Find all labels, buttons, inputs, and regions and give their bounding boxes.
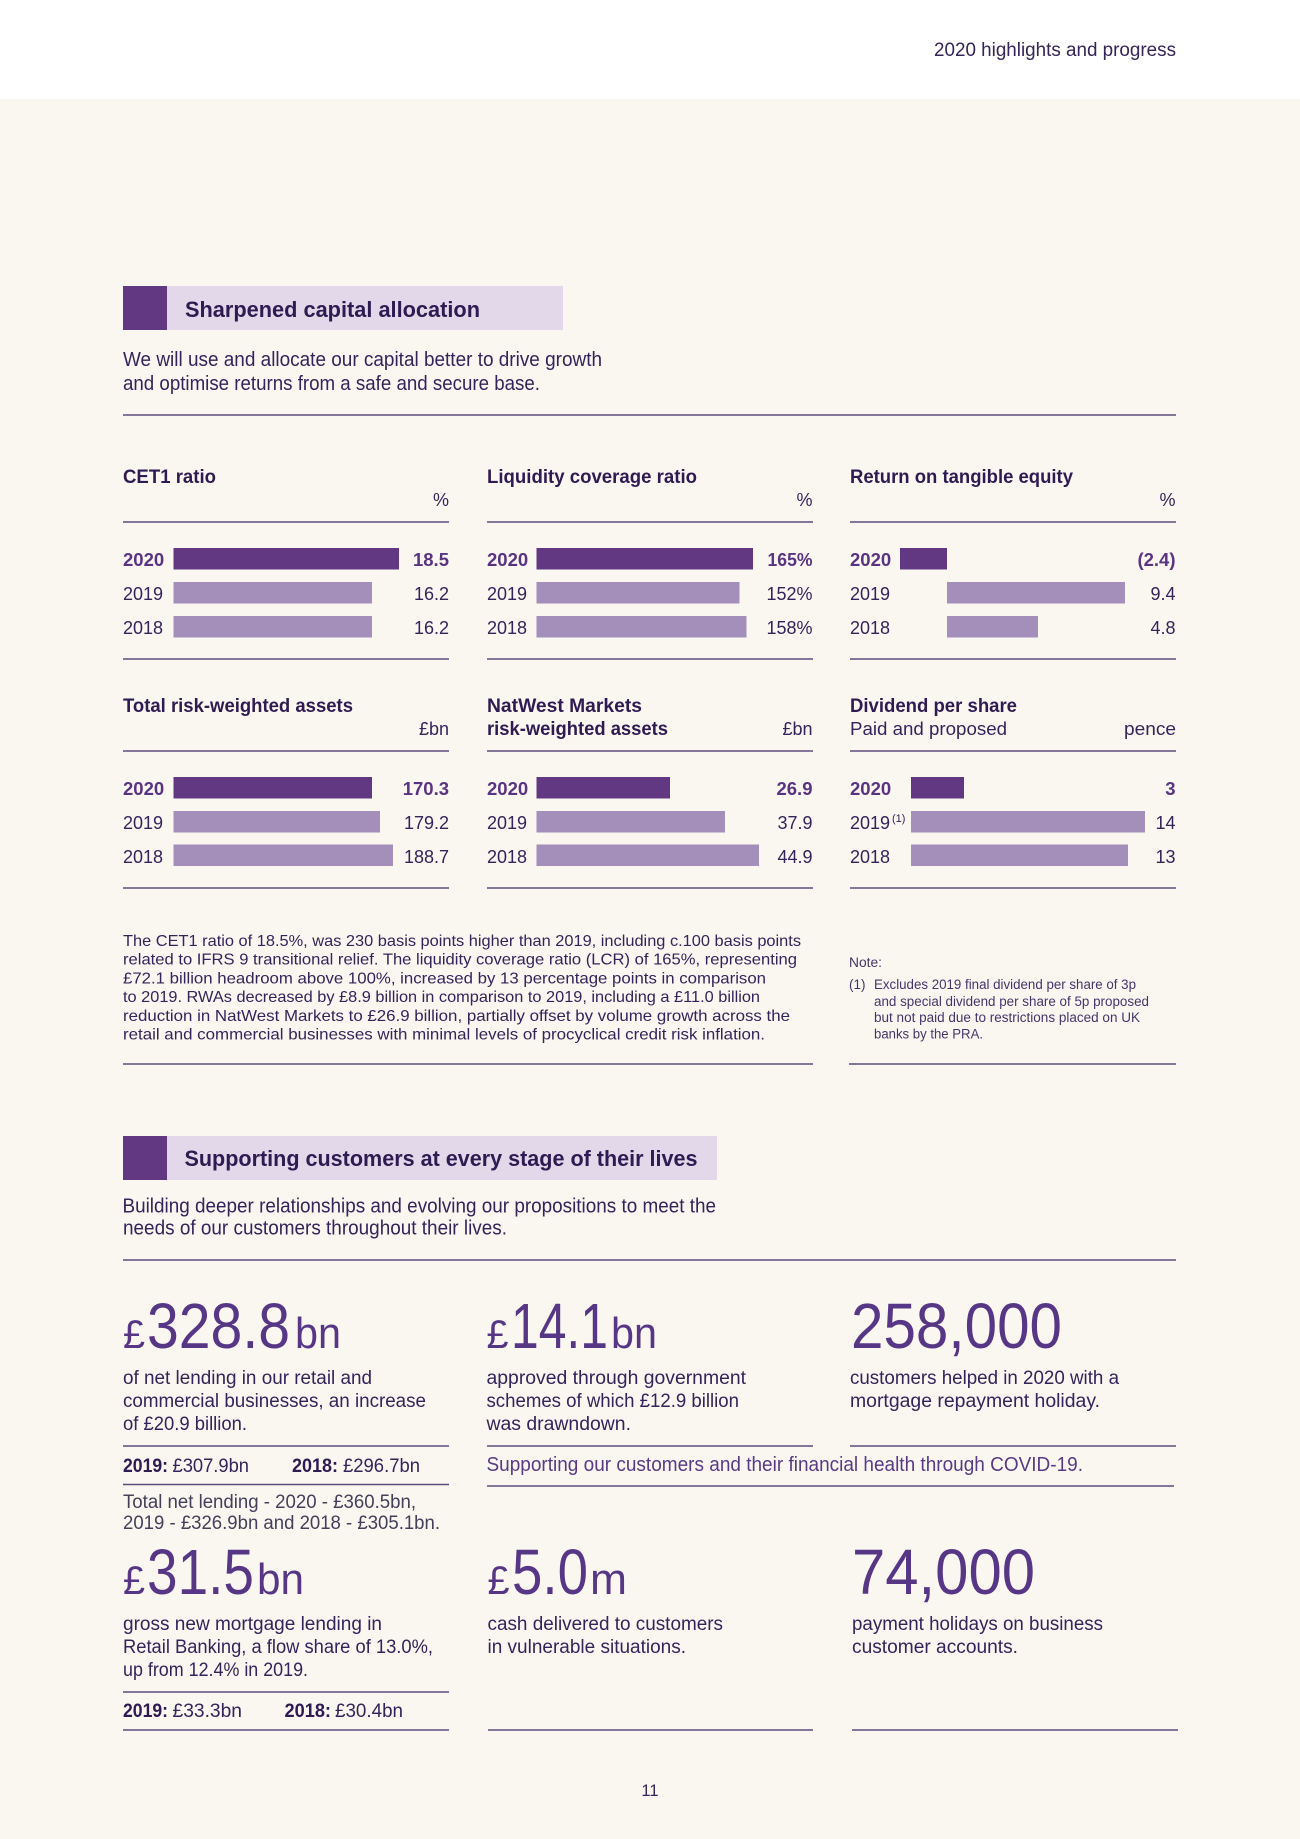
- section intro: capital allocation: [123, 349, 602, 395]
- panel: Total risk-weighted assets chart: Total risk-weighted assets: [123, 696, 353, 717]
- panel: Dividend per share chart: Paid and proposed: [850, 719, 1007, 739]
- panel: Total risk-weighted assets chart: [123, 696, 449, 888]
- panel: Dividend per share chart: 2020: [850, 778, 891, 799]
- section intro: capital allocation: We will use and allocate our capital better to drive growth: [123, 349, 602, 371]
- page number: 11: [641, 1782, 659, 1800]
- panel: NatWest Markets risk-weighted assets chart: 37.9: [777, 813, 812, 833]
- stat: government schemes: 14.1: [511, 1290, 608, 1362]
- panel: Dividend per share chart: Dividend per share: [850, 696, 1017, 717]
- panel: Return on tangible equity chart: Return on tangible equity: [850, 467, 1073, 488]
- note: total net lending: Total net lending - 2020 - £360.5bn,: [123, 1492, 416, 1513]
- panel: NatWest Markets risk-weighted assets chart: 2020: [487, 778, 528, 799]
- panel: Liquidity coverage ratio chart: 2020: [487, 549, 528, 570]
- panel: Return on tangible equity chart: 2020: [850, 549, 891, 570]
- panel: Total risk-weighted assets chart: 188.7: [404, 847, 449, 867]
- panel: CET1 ratio chart: 2018: [123, 618, 163, 638]
- panel: Dividend per share chart: 2018: [850, 847, 890, 867]
- stat: cash delivered: cash delivered to customers: [488, 1614, 723, 1635]
- stat: net lending: commercial businesses, an increase: [123, 1391, 426, 1412]
- stat: net lending: 2019:: [123, 1456, 168, 1477]
- stat: net lending: £296.7bn: [343, 1456, 420, 1477]
- stat: mortgage lending: gross new mortgage lending in: [123, 1614, 382, 1635]
- section intro: supporting customers: [122, 1196, 716, 1240]
- stat: government schemes: approved through government: [486, 1368, 747, 1389]
- stat: payment holidays: payment holidays on business: [852, 1614, 1103, 1635]
- panel: NatWest Markets risk-weighted assets chart: 44.9: [777, 847, 812, 867]
- stat: government schemes: £: [486, 1313, 508, 1357]
- panel: Dividend per share chart: 13: [1155, 847, 1176, 867]
- stat: mortgage lending: Retail Banking, a flow share of 13.0%,: [123, 1637, 433, 1658]
- panel: NatWest Markets risk-weighted assets chart: risk-weighted assets: [487, 719, 668, 740]
- stat: cash delivered: [488, 1536, 813, 1730]
- panel: Dividend per share chart: [850, 696, 1176, 888]
- panel: Return on tangible equity chart: 9.4: [1150, 584, 1176, 604]
- stat: payment holidays: customer accounts.: [852, 1637, 1018, 1658]
- panel: Return on tangible equity chart: 4.8: [1150, 618, 1176, 638]
- panel: CET1 ratio chart: 2020: [123, 549, 164, 570]
- note: total net lending: 2019 - £326.9bn and 2018 - £305.1bn.: [123, 1513, 440, 1534]
- commentary text block: reduction in NatWest Markets to £26.9 billion, partially offset by volume growth across the: [123, 1008, 790, 1025]
- panel: Return on tangible equity chart: 2018: [850, 618, 890, 638]
- panel: Liquidity coverage ratio chart: 152%: [766, 584, 812, 604]
- panel: Return on tangible equity chart: %: [1159, 490, 1176, 510]
- panel: Total risk-weighted assets chart: 2020: [123, 778, 164, 799]
- panel: CET1 ratio chart: %: [433, 490, 449, 510]
- panel: Liquidity coverage ratio chart: 165%: [768, 549, 812, 570]
- section heading: Sharpened capital allocation: [123, 286, 563, 330]
- commentary text block: The CET1 ratio of 18.5%, was 230 basis points higher than 2019, including c.100 basis points: [123, 933, 801, 950]
- panel: Liquidity coverage ratio chart: %: [796, 490, 812, 510]
- footnote: (1): [849, 977, 866, 992]
- commentary text block: retail and commercial businesses with minimal levels of procyclical credit risk inflation.: [123, 1026, 765, 1044]
- footnote: Note:: [849, 955, 882, 970]
- stat: mortgage repayment holiday: 258,000: [851, 1290, 1062, 1362]
- section intro: supporting customers: Building deeper relationships and evolving our propositions to meet the: [122, 1196, 716, 1218]
- panel: Liquidity coverage ratio chart: [487, 467, 813, 659]
- panel: Liquidity coverage ratio chart: 2019: [487, 584, 527, 604]
- stat: government schemes: schemes of which £12.9 billion: [486, 1391, 739, 1412]
- footnote: Excludes 2019 final dividend per share of 3p: [874, 977, 1136, 992]
- stat: net lending: [123, 1290, 449, 1484]
- stat: mortgage lending: 31.5: [147, 1536, 254, 1608]
- stat: cash delivered: m: [590, 1555, 627, 1604]
- stat: mortgage lending: [123, 1536, 449, 1730]
- stat: net lending: 2018:: [292, 1456, 338, 1477]
- panel: NatWest Markets risk-weighted assets chart: [487, 696, 813, 888]
- panel: Liquidity coverage ratio chart: 2018: [487, 618, 527, 638]
- panel: NatWest Markets risk-weighted assets chart: £bn: [782, 719, 812, 739]
- note: total net lending: [123, 1492, 440, 1534]
- stat: mortgage repayment holiday: [850, 1290, 1176, 1446]
- commentary text block: £72.1 billion headroom above 100%, increased by 13 percentage points in comparison: [123, 970, 766, 987]
- commentary text block: [123, 933, 801, 1044]
- footnote: banks by the PRA.: [874, 1026, 983, 1042]
- stat: cash delivered: 5.0: [512, 1536, 588, 1608]
- stat: government schemes: bn: [611, 1309, 657, 1358]
- panel: Return on tangible equity chart: (2.4): [1137, 549, 1176, 570]
- section heading: Supporting customers: [123, 1136, 717, 1180]
- panel: Liquidity coverage ratio chart: 158%: [766, 618, 812, 638]
- commentary text block: to 2019. RWAs decreased by £8.9 billion in comparison to 2019, including a £11.0 billion: [123, 989, 760, 1006]
- stat: net lending: £307.9bn: [172, 1456, 249, 1477]
- panel: Dividend per share chart: 2019: [850, 813, 890, 833]
- section heading: Supporting customers: Supporting customers at every stage of their lives: [184, 1146, 698, 1171]
- panel: Return on tangible equity chart: [850, 467, 1176, 659]
- stat: mortgage lending: bn: [257, 1555, 304, 1604]
- stat: net lending: of £20.9 billion.: [123, 1414, 247, 1435]
- footnote: but not paid due to restrictions placed on UK: [874, 1010, 1140, 1025]
- panel: Total risk-weighted assets chart: 170.3: [403, 778, 449, 799]
- panel: NatWest Markets risk-weighted assets chart: 2019: [487, 813, 527, 833]
- panel: NatWest Markets risk-weighted assets chart: 2018: [487, 847, 527, 867]
- stat: mortgage repayment holiday: mortgage repayment holiday.: [850, 1391, 1100, 1412]
- stat: mortgage lending: up from 12.4% in 2019.: [123, 1660, 308, 1681]
- panel: CET1 ratio chart: 2019: [123, 584, 163, 604]
- section intro: capital allocation: and optimise returns from a safe and secure base.: [123, 373, 540, 395]
- stat: net lending: 328.8: [147, 1290, 290, 1362]
- stat: mortgage lending: 2018:: [284, 1701, 331, 1722]
- panel: NatWest Markets risk-weighted assets chart: 26.9: [776, 778, 812, 799]
- panel: CET1 ratio chart: 16.2: [414, 584, 449, 604]
- footnote: [849, 955, 1149, 1042]
- stat: payment holidays: [852, 1536, 1178, 1730]
- stat: cash delivered: in vulnerable situations.: [488, 1637, 686, 1658]
- panel: Return on tangible equity chart: 2019: [850, 584, 890, 604]
- stat: cash delivered: £: [488, 1559, 510, 1603]
- panel: Liquidity coverage ratio chart: Liquidity coverage ratio: [487, 467, 697, 488]
- panel: Dividend per share chart: 14: [1155, 813, 1176, 833]
- commentary text block: related to IFRS 9 transitional relief. The liquidity coverage ratio (LCR) of 165%, representing: [123, 952, 797, 969]
- panel: CET1 ratio chart: [123, 467, 449, 659]
- page header title: 2020 highlights and progress: [934, 40, 1176, 61]
- panel: CET1 ratio chart: CET1 ratio: [123, 467, 216, 488]
- stat: mortgage lending: £33.3bn: [172, 1701, 242, 1722]
- panel: CET1 ratio chart: 18.5: [413, 549, 449, 570]
- stat: net lending: £: [123, 1313, 145, 1357]
- panel: Dividend per share chart: (1): [892, 813, 905, 825]
- stat: payment holidays: 74,000: [852, 1536, 1035, 1608]
- panel: Total risk-weighted assets chart: £bn: [419, 719, 449, 739]
- panel: Dividend per share chart: pence: [1124, 719, 1176, 739]
- panel: Total risk-weighted assets chart: 2019: [123, 813, 163, 833]
- panel: CET1 ratio chart: 16.2: [414, 618, 449, 638]
- stat: government schemes: was drawndown.: [485, 1414, 631, 1435]
- panel: Dividend per share chart: 3: [1165, 778, 1176, 799]
- panel: Total risk-weighted assets chart: 179.2: [404, 813, 449, 833]
- stat: mortgage repayment holiday: customers helped in 2020 with a: [850, 1368, 1119, 1389]
- section heading: Sharpened capital allocation: Sharpened capital allocation: [185, 297, 480, 322]
- stat: net lending: bn: [295, 1309, 341, 1358]
- panel: Total risk-weighted assets chart: 2018: [123, 847, 163, 867]
- footnote: and special dividend per share of 5p proposed: [874, 994, 1149, 1009]
- stat: net lending: of net lending in our retail and: [123, 1368, 372, 1389]
- stat: mortgage lending: 2019:: [123, 1701, 168, 1722]
- stat: government schemes: [485, 1290, 813, 1446]
- COVID-19 sub-heading: Supporting our customers and their financial health through COVID-19.: [486, 1454, 1083, 1476]
- stat: mortgage lending: £30.4bn: [335, 1701, 403, 1722]
- section intro: supporting customers: needs of our customers throughout their lives.: [123, 1218, 507, 1240]
- stat: mortgage lending: £: [123, 1559, 145, 1603]
- panel: NatWest Markets risk-weighted assets chart: NatWest Markets: [487, 696, 642, 717]
